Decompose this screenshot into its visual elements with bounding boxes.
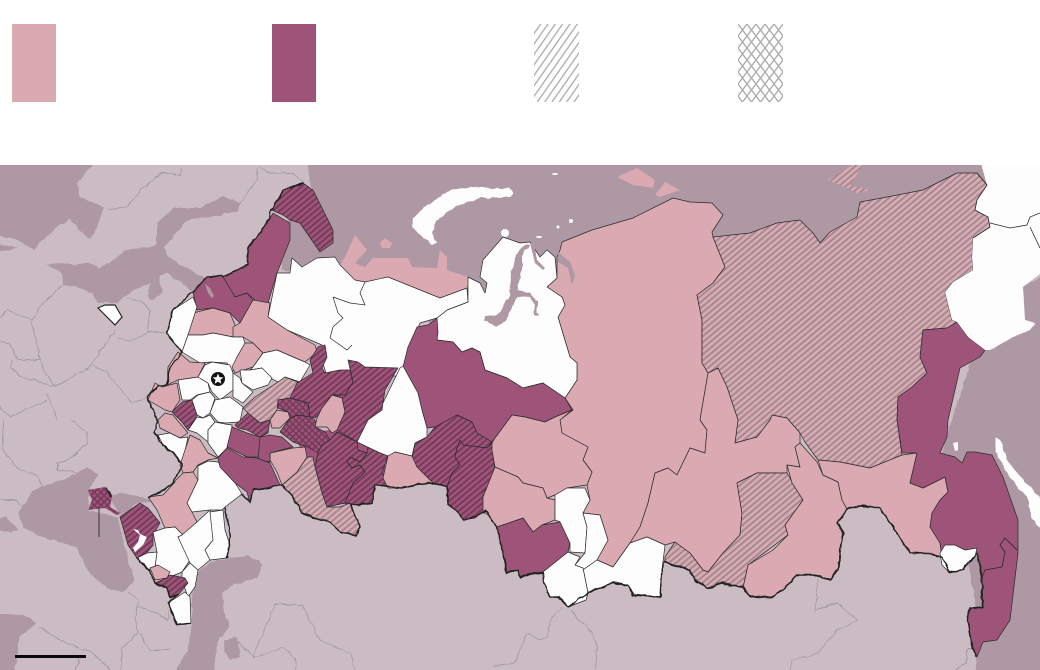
region: Yamal white bbox=[437, 237, 577, 398]
icon: Moscow star marker bbox=[211, 372, 225, 386]
Sakhalin strip bbox=[995, 437, 1040, 537]
region: Novgorod bbox=[188, 308, 235, 337]
Volga gap underlay bbox=[296, 428, 388, 504]
map bbox=[0, 150, 1040, 670]
region: Kursk hatched bbox=[172, 400, 197, 430]
Novaya Zemlya island bbox=[412, 187, 514, 245]
region: Volgograd white bbox=[187, 461, 242, 512]
region: Udmurtia bbox=[315, 395, 345, 433]
legend swatch: light pink bbox=[12, 24, 56, 102]
region: Bryansk bbox=[148, 383, 180, 412]
region: Leningrad dark bbox=[193, 275, 253, 323]
region: Saratov dark bbox=[218, 448, 280, 503]
legend swatch: diagonal hatch bbox=[534, 24, 579, 102]
region: Khabarovsk and Primorsky dark bbox=[897, 322, 1018, 657]
region: Chuvashia bbox=[270, 410, 290, 428]
Magadan inner borders bbox=[973, 173, 1040, 248]
Komi inner borders bbox=[330, 282, 365, 350]
legend swatch: dark plum bbox=[272, 24, 316, 102]
neighbouring country borders bbox=[0, 167, 977, 670]
region: Chechnya and Dagestan hatched bbox=[155, 575, 188, 597]
region: Vladimir white bbox=[233, 373, 253, 403]
region: Perm hatched bbox=[332, 360, 398, 442]
region: Lipetsk white bbox=[188, 415, 215, 442]
region: Samara dark bbox=[258, 435, 293, 462]
region: Voronezh white bbox=[158, 433, 188, 465]
region: Zabaykalsky bbox=[743, 443, 847, 598]
region: Murmansk hatched bbox=[272, 183, 333, 252]
region: Altai Krai dark bbox=[497, 518, 570, 577]
region: Mari cross hatched bbox=[278, 398, 310, 418]
region: Omsk hatched bbox=[447, 440, 495, 520]
region: Nenets light bbox=[340, 168, 680, 298]
region: Orenburg hatched bbox=[282, 457, 360, 535]
region: Kemerovo white bbox=[555, 488, 590, 553]
region: Sverdlovsk white bbox=[357, 366, 427, 456]
region: Kaliningrad white bbox=[98, 305, 122, 325]
region: Khakassia white bbox=[575, 513, 608, 572]
region: Kurgan hatched bbox=[412, 415, 492, 487]
region: Yaroslavl bbox=[232, 343, 263, 373]
Yenisei inlet bbox=[558, 252, 575, 285]
legend swatch: cross hatch bbox=[738, 24, 783, 102]
map: land background bbox=[0, 165, 1040, 670]
Yakutia arctic islands hatched bbox=[828, 165, 870, 193]
region: Karelia dark bbox=[222, 213, 290, 303]
region: Chelyabinsk light bbox=[383, 452, 433, 488]
region: Mordovia hatched bbox=[235, 413, 270, 437]
region: Irkutsk bbox=[630, 368, 800, 572]
region: Voronezh east bbox=[180, 435, 218, 473]
region: Jewish autonomous white bbox=[940, 545, 977, 573]
region: Stavropol small bbox=[150, 565, 170, 580]
region: Tomsk bbox=[492, 410, 592, 498]
callout tick: Crimea bbox=[98, 507, 100, 537]
region: Buryatia hatched bbox=[665, 473, 803, 588]
region: Magadan and Chukotka white bbox=[945, 160, 1040, 350]
region: Moscow white bbox=[198, 362, 233, 400]
region: Tatarstan cross hatched bbox=[280, 415, 330, 453]
region: Adygea white bbox=[133, 529, 147, 552]
region: Vologda bbox=[233, 300, 317, 362]
region: Kaluga white bbox=[178, 377, 210, 400]
region: Chelyabinsk hatched bbox=[345, 447, 390, 505]
region: Penza dark bbox=[227, 427, 260, 457]
region: Komi white bbox=[268, 257, 468, 380]
region: Smolensk bbox=[167, 352, 205, 385]
region: Pskov white bbox=[167, 297, 197, 352]
region: Rostov bbox=[148, 472, 198, 535]
region: Crimea cross hatched bbox=[88, 487, 120, 515]
region: Tver white bbox=[182, 333, 245, 373]
region: Ryazan white bbox=[210, 397, 243, 423]
region: Tuva white bbox=[580, 537, 665, 597]
region: Tyumen dark bbox=[403, 318, 572, 442]
inner border far east bbox=[982, 538, 1017, 577]
region: Amur bbox=[818, 453, 948, 557]
region: Bashkortostan hatched bbox=[315, 432, 367, 507]
Russia outer border bbox=[105, 183, 983, 657]
region: Krasnoyarsk bbox=[547, 198, 725, 567]
small arctic islands bbox=[501, 173, 573, 238]
Ob gulf bbox=[484, 245, 540, 327]
region: Kirov hatched bbox=[290, 345, 353, 418]
region: Ulyanovsk bbox=[270, 447, 307, 485]
Taz inlet bbox=[530, 243, 545, 270]
region: Yakutia hatched bbox=[697, 173, 990, 468]
scale bar bbox=[15, 655, 86, 658]
region: Caucasus white group bbox=[137, 510, 230, 625]
seas and lakes bbox=[0, 150, 1040, 670]
region: Tambov white bbox=[208, 422, 232, 457]
region: Tula white bbox=[192, 392, 215, 418]
region: Ivanovo white bbox=[240, 368, 272, 390]
region: Belgorod bbox=[158, 413, 188, 438]
region: Altai white bbox=[543, 552, 588, 607]
Lake Ladoga mark bbox=[205, 284, 214, 298]
region: Nizhny Novgorod hatched bbox=[243, 377, 300, 423]
region: Novosibirsk bbox=[483, 467, 555, 532]
region: Kostroma white bbox=[250, 350, 310, 382]
islands in bay bbox=[953, 442, 958, 451]
region: Krasnodar hatched bbox=[120, 503, 160, 558]
legend: swatches bbox=[12, 24, 783, 102]
